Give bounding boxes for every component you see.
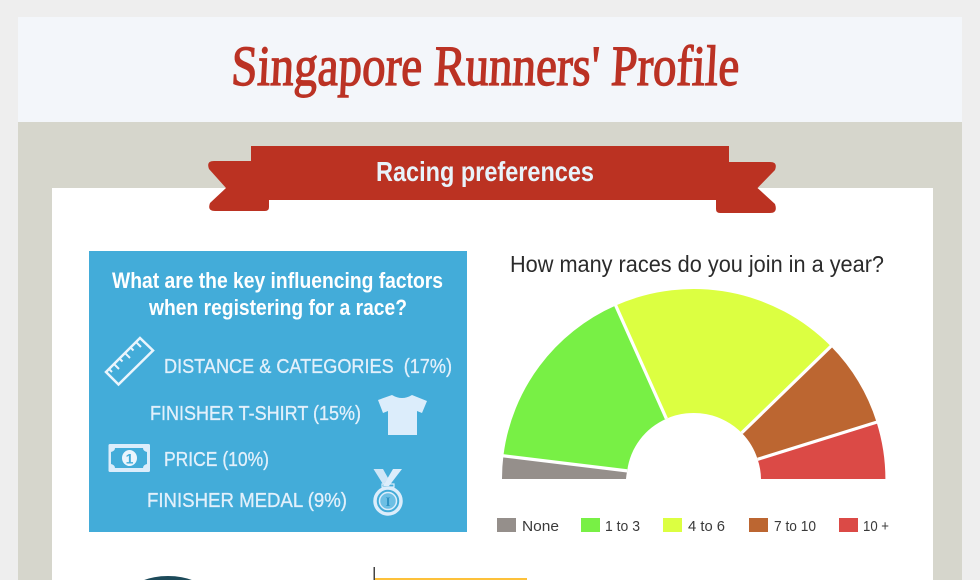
icon: banknote: 1: [126, 450, 134, 466]
panel heading: What are the key influencing factors: [112, 268, 443, 293]
panel: key influencing factors: [89, 251, 467, 532]
legend item: 10 plus: 10 +: [863, 518, 889, 535]
next chart: bar axis and first bar: [374, 567, 527, 580]
next chart: dark circle top: [132, 576, 204, 580]
panel: racing preferences: [52, 188, 933, 580]
title: Singapore Runners' Profile: [230, 35, 741, 98]
legend item: 4 to 6: [663, 518, 725, 535]
segment: 4 to 6: [616, 289, 831, 433]
legend item: 7 to 10: [749, 518, 816, 535]
icon: ruler: [106, 338, 153, 384]
panel heading: [112, 268, 443, 320]
factor: finisher medal: FINISHER MEDAL (9%): [147, 490, 347, 512]
legend: [497, 518, 889, 535]
panel: races per year chart: [497, 251, 889, 535]
factor: finisher t-shirt: FINISHER T-SHIRT (15%): [150, 403, 361, 425]
icon: t-shirt: [378, 395, 427, 435]
icon: banknote: [108, 444, 150, 472]
segment: 10 plus: [758, 422, 885, 479]
icon: medal: [374, 469, 402, 514]
section ribbon: [208, 146, 776, 213]
legend item: 1 to 3: 1 to 3: [605, 518, 640, 535]
legend item: none: None: [522, 518, 559, 535]
panel: header: [18, 17, 962, 122]
chart heading: How many races do you join in a year?: [510, 251, 884, 277]
legend item: 1 to 3: [581, 518, 640, 535]
factor: price: PRICE (10%): [164, 449, 269, 471]
icon: medal: I: [385, 494, 391, 509]
semicircle chart: [500, 289, 885, 479]
legend item: none: [497, 518, 559, 535]
segment: 7 to 10: [742, 346, 877, 459]
segment: 1 to 3: [503, 306, 666, 471]
factor: distance and categories: DISTANCE & CATEGORIES (17%): [164, 356, 452, 378]
legend item: 7 to 10: 7 to 10: [774, 518, 816, 535]
legend item: 10 plus: [839, 518, 889, 535]
panel heading: when registering for a race?: [148, 295, 407, 320]
segment: none: [502, 456, 627, 479]
ribbon heading: Racing preferences: [376, 156, 594, 187]
legend item: 4 to 6: 4 to 6: [688, 518, 725, 535]
